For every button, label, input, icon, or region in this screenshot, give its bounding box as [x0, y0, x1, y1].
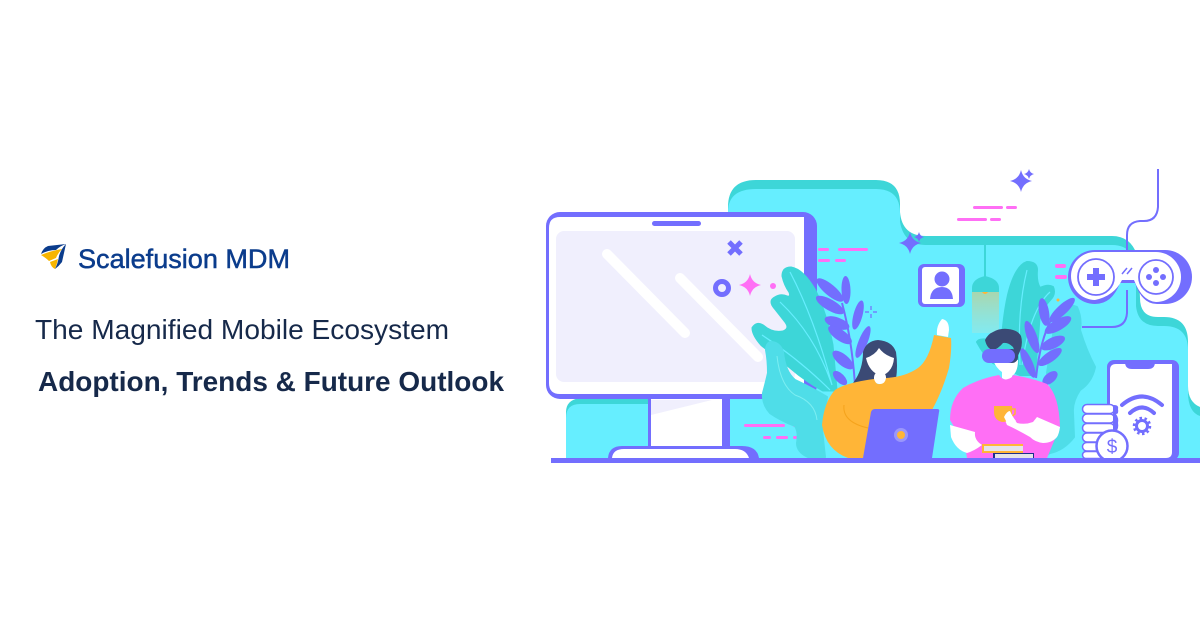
left pad: [1078, 259, 1114, 295]
books: [982, 444, 1034, 458]
heading: main title: Adoption, Trends & Future Outlook: [38, 366, 504, 397]
cable and game controller: [1068, 169, 1192, 327]
icon: logo arrow: [41, 244, 66, 269]
gear icon: [1134, 418, 1150, 434]
monitor stand: [608, 398, 759, 458]
hair: [985, 329, 1022, 357]
phone with wifi: [1107, 360, 1179, 460]
profile card icon: [918, 264, 965, 307]
coin stack: $: [1107, 437, 1118, 458]
raised hand: [937, 319, 949, 337]
coin stack: [1082, 404, 1128, 462]
screen icons: [716, 242, 776, 296]
woman with laptop: [822, 319, 951, 458]
plant: left: [753, 268, 874, 457]
laptop: [863, 409, 939, 458]
head and neck: [993, 360, 1018, 380]
illustration: [546, 169, 1200, 463]
man with VR headset: [950, 329, 1060, 458]
orange sweater: [822, 335, 951, 458]
logo wordmark: Scalefusion MDM: [78, 244, 290, 274]
sparkle stars: [865, 169, 1034, 318]
monitor: [546, 212, 817, 458]
controller body: [1068, 250, 1192, 304]
hair: [853, 340, 897, 383]
leaf veins: [762, 272, 832, 390]
face: [866, 348, 894, 376]
cable: [1082, 169, 1158, 327]
coffee mug: [994, 406, 1016, 425]
white arms: [950, 416, 1060, 453]
lower light leaf: [763, 342, 827, 457]
big teal leaf: [753, 268, 836, 390]
light teal leaf: [1040, 306, 1095, 458]
plant: right: [977, 262, 1095, 458]
monitor frame: [546, 212, 817, 399]
cyan background blob: [566, 180, 1200, 458]
ground line: [551, 458, 1200, 463]
right pad: [1139, 260, 1173, 294]
VR headset: [982, 349, 1018, 363]
purple fern: [813, 275, 874, 388]
heading: subtitle line: The Magnified Mobile Ecosystem: [35, 314, 449, 345]
wifi icon: [1122, 396, 1162, 413]
logo: Scalefusion MDM: [41, 244, 290, 274]
monitor screen: [549, 217, 804, 394]
pink dashes: [744, 206, 1067, 439]
pink shirt: [950, 375, 1060, 458]
hanging lamp: [972, 245, 999, 333]
purple fern: [1017, 295, 1078, 388]
teal leaf behind man: [977, 262, 1054, 375]
